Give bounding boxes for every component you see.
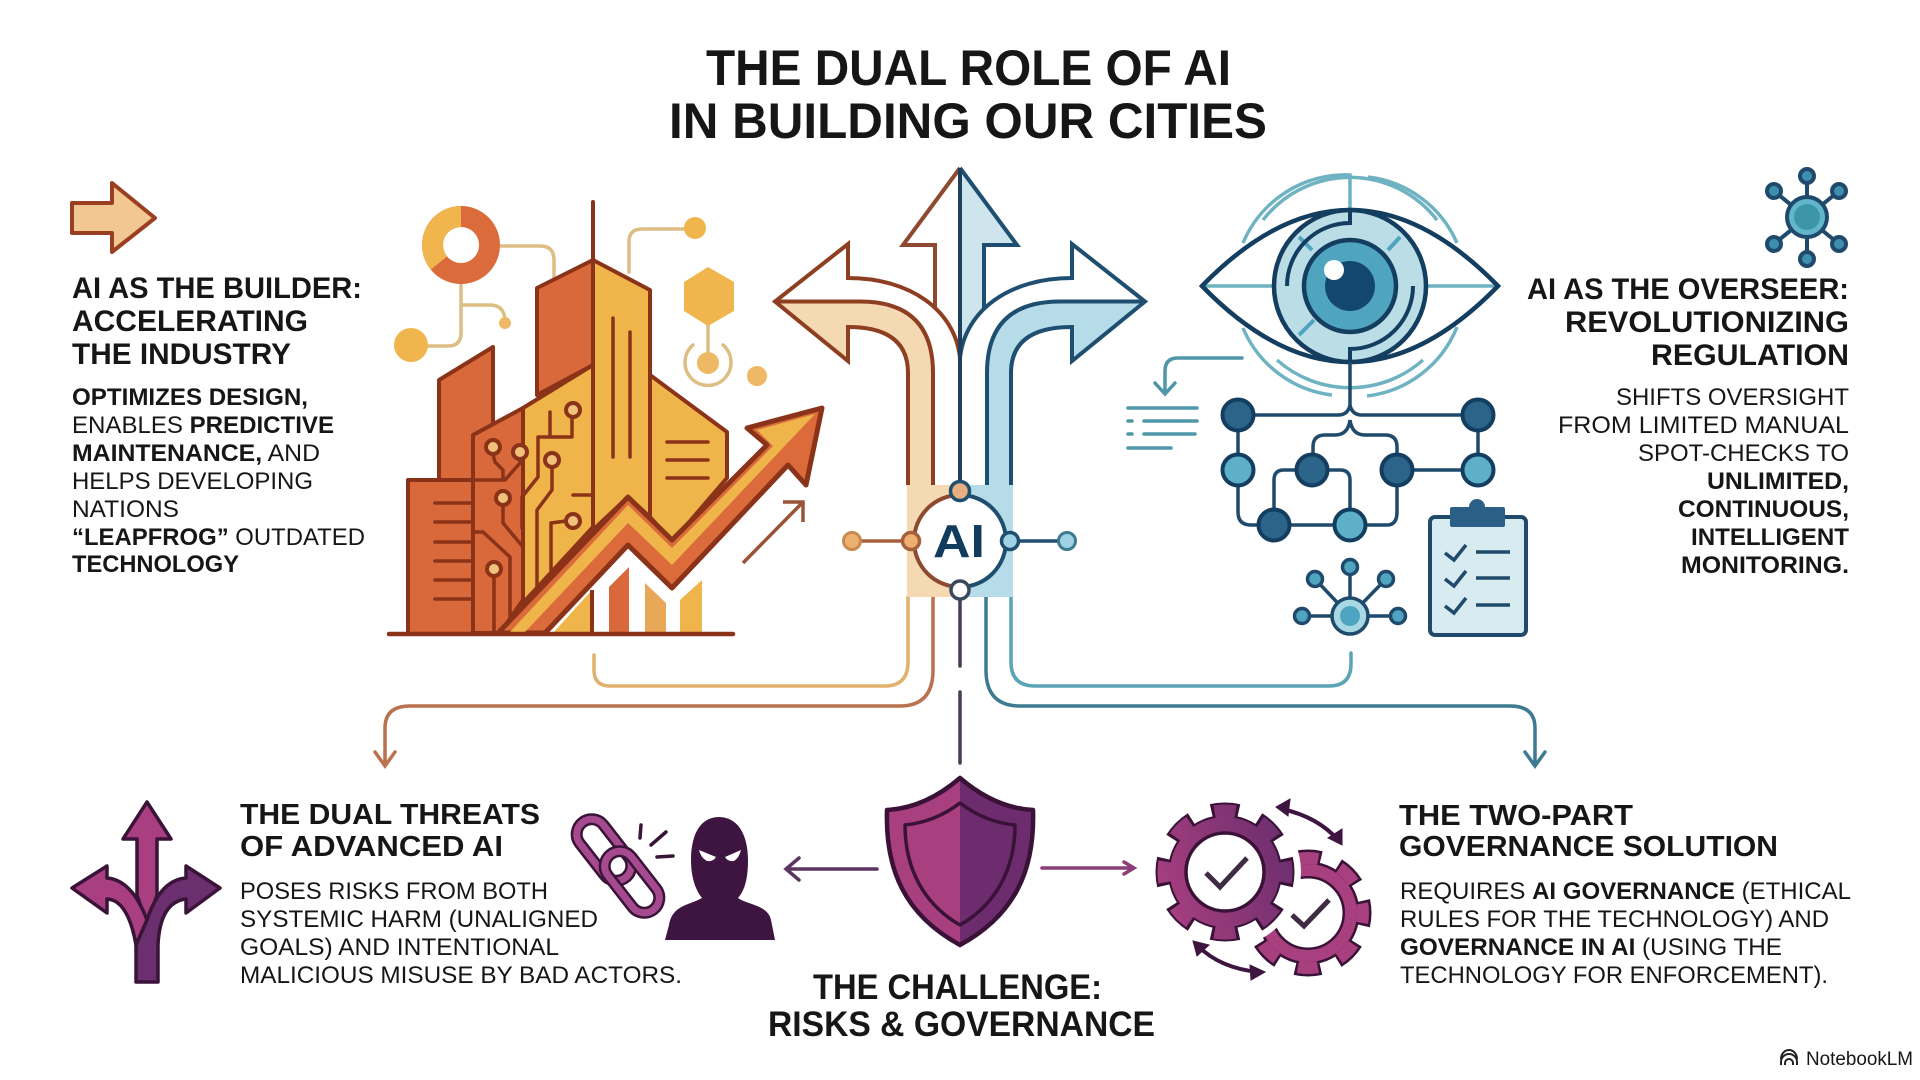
arrow: connector lines downward <box>375 597 1545 766</box>
text block: builder description <box>72 384 365 578</box>
text block: builder description: HELPS DEVELOPING <box>72 468 313 495</box>
arrow: right overseer arrow <box>960 244 1145 485</box>
title: IN BUILDING OUR CITIES <box>669 93 1267 149</box>
heading: builder <box>72 272 362 371</box>
arrow: small growth arrow <box>743 502 803 563</box>
heading: builder: THE INDUSTRY <box>72 338 291 371</box>
heading: builder: AI AS THE BUILDER: <box>72 272 362 305</box>
heading: challenge: RISKS & GOVERNANCE <box>768 1005 1155 1044</box>
text block: dual threats description: MALICIOUS MISUSE BY BAD ACTORS. <box>240 962 682 989</box>
text block: builder description: NATIONS <box>72 496 179 523</box>
icon: eye <box>1202 175 1498 396</box>
text block: builder description: “LEAPFROG” OUTDATED <box>72 524 365 551</box>
panel: oversight illustration <box>1128 175 1526 635</box>
icon: circuit traces <box>435 318 708 633</box>
text block: overseer description: INTELLIGENT <box>1691 524 1849 551</box>
icon: small bars <box>609 567 702 633</box>
icon: flow tree <box>1222 362 1494 540</box>
text block: overseer description: MONITORING. <box>1681 552 1849 579</box>
icon: small network <box>1294 560 1406 634</box>
panel: dual threats <box>72 799 775 989</box>
text block: builder description: OPTIMIZES DESIGN, <box>72 384 308 411</box>
text block: dual threats description: GOALS) AND INTENTIONAL <box>240 934 559 961</box>
label: AI: AI <box>933 515 985 567</box>
icon: forked arrow <box>72 802 220 982</box>
panel: AI as the builder text <box>72 183 365 578</box>
text block: governance description: TECHNOLOGY FOR ENFORCEMENT). <box>1400 962 1828 989</box>
arrow: to solution <box>1042 862 1134 874</box>
arrow: to threats <box>786 858 877 880</box>
heading: overseer: REVOLUTIONIZING <box>1565 306 1849 339</box>
text block: dual threats description <box>240 878 682 989</box>
icon: shield <box>887 778 1033 945</box>
heading: overseer: AI AS THE OVERSEER: <box>1527 273 1849 306</box>
panel: AI as the overseer text <box>1527 169 1849 579</box>
arrow: left builder arrow <box>775 244 960 485</box>
text block: dual threats description: SYSTEMIC HARM (UNALIGNED <box>240 906 598 933</box>
panel: city and growth illustration <box>389 202 822 634</box>
central divider line <box>958 168 962 488</box>
panel: AI crossroads arrows <box>375 168 1545 766</box>
panel: governance solution <box>1149 796 1851 989</box>
heading: dual threats: THE DUAL THREATS <box>240 799 540 831</box>
heading: governance <box>1399 800 1778 863</box>
AI hub <box>844 482 1076 599</box>
ground line <box>389 632 733 636</box>
icon: document with arrow <box>1128 358 1242 448</box>
icon: broken chain <box>571 813 673 919</box>
arrow: up arrow <box>903 168 1017 358</box>
heading: governance: GOVERNANCE SOLUTION <box>1399 831 1778 863</box>
text block: overseer description: CONTINUOUS, <box>1678 496 1849 523</box>
text block: overseer description: SPOT-CHECKS TO <box>1638 440 1849 467</box>
icon: overseer network <box>1767 169 1846 266</box>
watermark: NotebookLM: NotebookLM <box>1806 1049 1913 1070</box>
text block: governance description <box>1400 878 1851 989</box>
heading: dual threats: OF ADVANCED AI <box>240 831 503 863</box>
text block: overseer description: SHIFTS OVERSIGHT <box>1616 384 1849 411</box>
heading: challenge <box>768 968 1155 1044</box>
arrow: rotation arrows <box>1193 799 1342 980</box>
text block: governance description: RULES FOR THE TECHNOLOGY) AND <box>1400 906 1829 933</box>
heading: builder: ACCELERATING <box>72 305 308 338</box>
text block: builder description: MAINTENANCE, AND <box>72 440 320 467</box>
icon: masked bad actor <box>665 817 775 940</box>
arrow: rising growth arrow <box>498 408 822 633</box>
heading: dual threats <box>240 799 540 863</box>
text block: governance description: GOVERNANCE IN AI (USING THE <box>1400 934 1782 961</box>
title: THE DUAL ROLE OF AI <box>706 40 1231 96</box>
text block: dual threats description: POSES RISKS FROM BOTH <box>240 878 548 905</box>
icon: data connectors <box>394 216 767 386</box>
heading: governance: THE TWO-PART <box>1399 800 1633 832</box>
text block: builder description: TECHNOLOGY <box>72 551 239 578</box>
text block: overseer description: FROM LIMITED MANUAL <box>1558 412 1849 439</box>
icon: clipboard checklist <box>1430 499 1526 635</box>
heading: challenge: THE CHALLENGE: <box>813 968 1102 1007</box>
text block: overseer description: UNLIMITED, <box>1707 468 1849 495</box>
text block: overseer description <box>1558 384 1849 579</box>
icon: skyline buildings <box>408 202 727 634</box>
icon: builder arrow <box>72 183 155 252</box>
heading: overseer: REGULATION <box>1651 339 1849 372</box>
icon: gears <box>1149 796 1363 968</box>
text block: governance description: REQUIRES AI GOVERNANCE (ETHICAL <box>1400 878 1851 905</box>
text block: builder description: ENABLES PREDICTIVE <box>72 412 334 439</box>
heading: overseer <box>1527 273 1849 372</box>
panel: challenge shield <box>768 778 1155 1044</box>
title <box>669 40 1267 149</box>
